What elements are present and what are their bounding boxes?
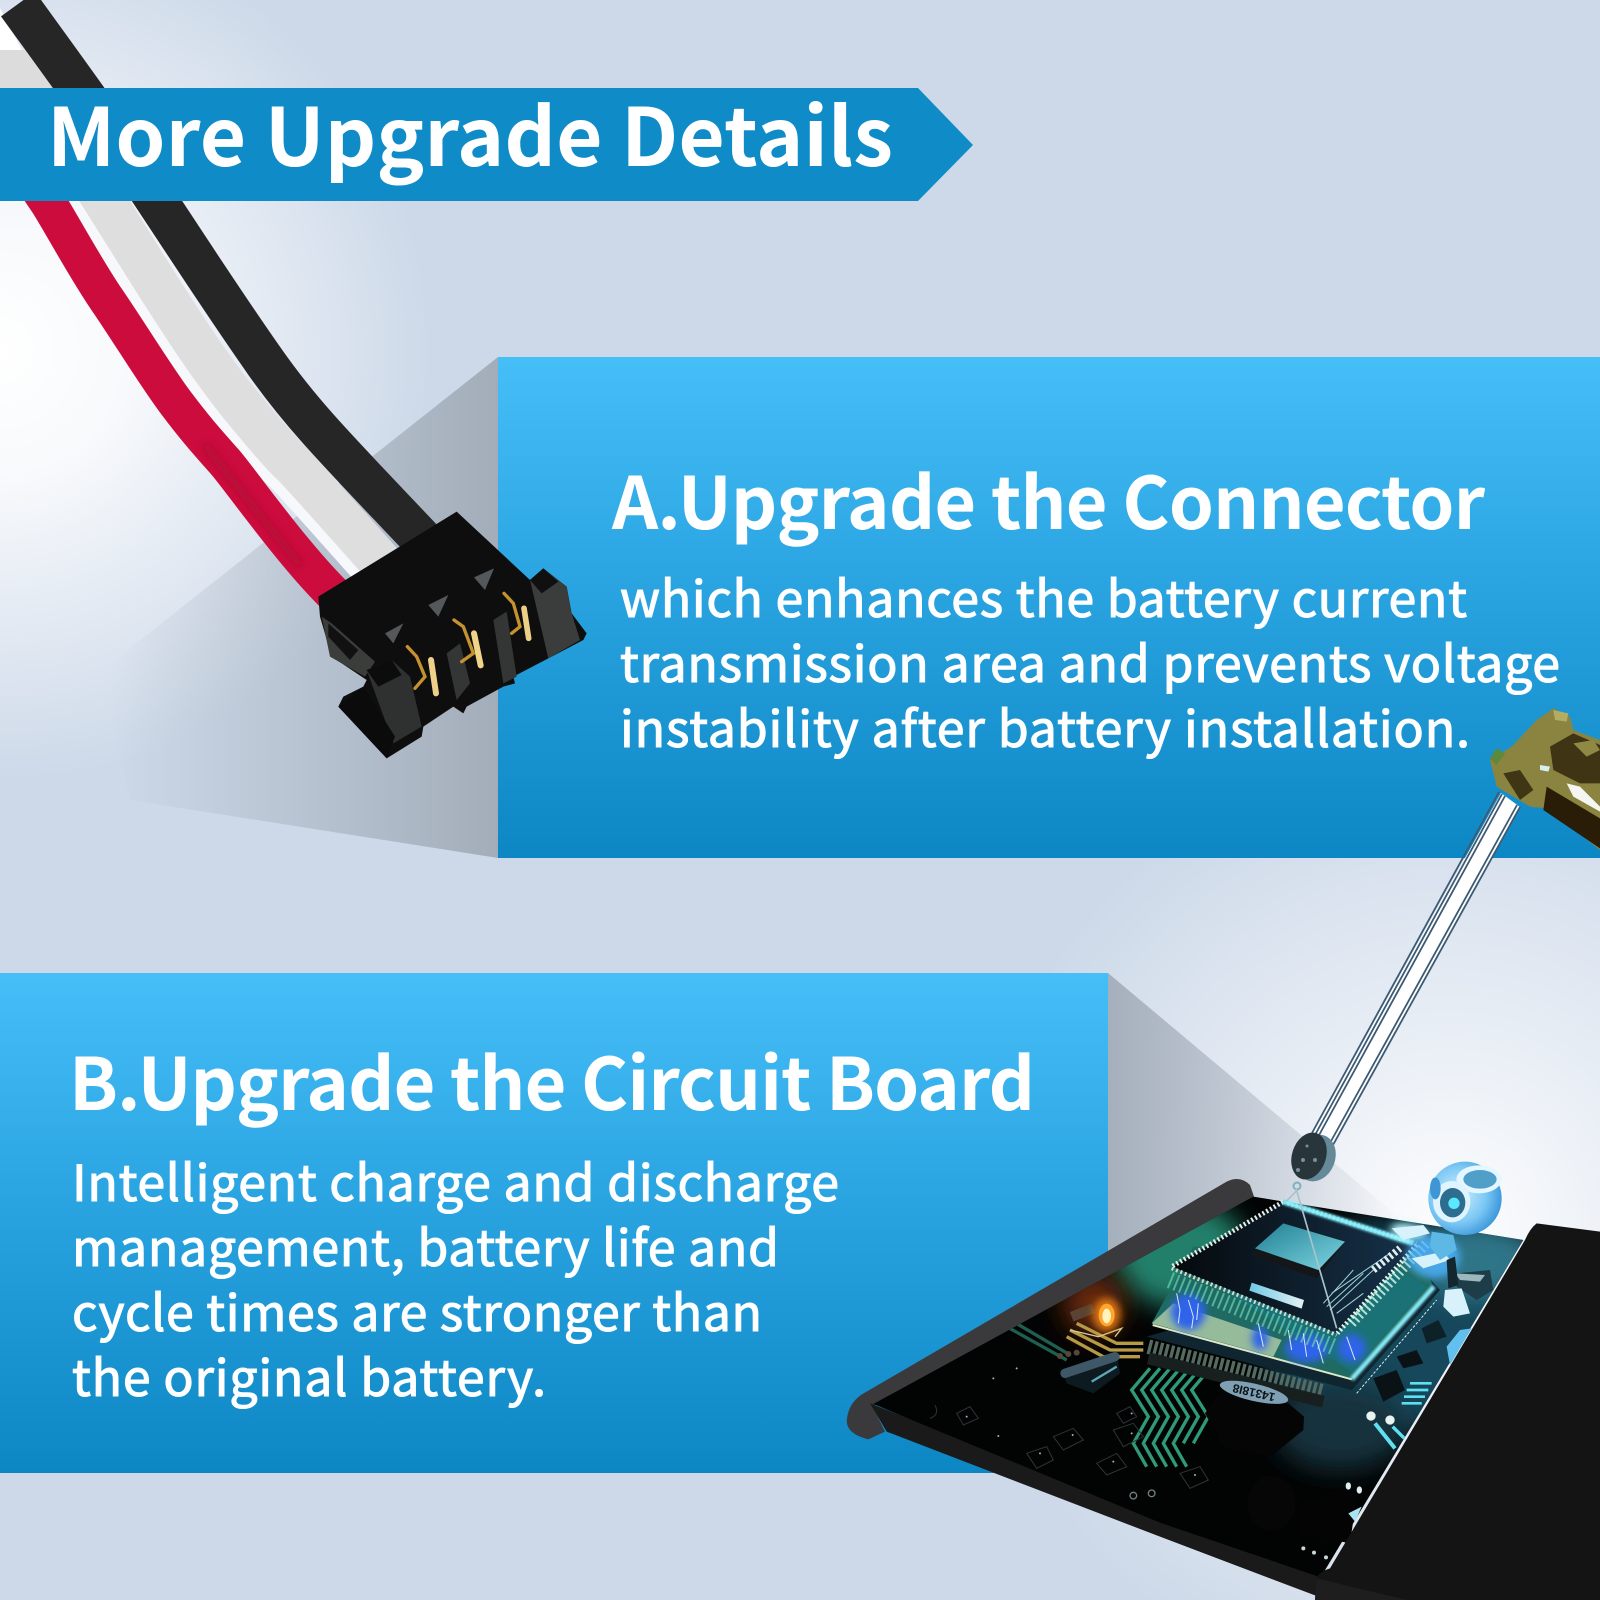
illustration: hook disc: [1285, 1128, 1343, 1190]
dark capacitor: [1248, 1476, 1296, 1531]
lightning detail: [1177, 1293, 1355, 1363]
illustration: circuit board: [847, 1162, 1600, 1600]
description B: Intelligent charge and discharge: [72, 1144, 839, 1216]
battery body: [1315, 1223, 1600, 1600]
right side ICs: [1357, 1270, 1493, 1425]
text block: connector upgrade: [611, 445, 1560, 762]
small sockets: [930, 1405, 1208, 1488]
heading A: A.Upgrade the Connector: [611, 445, 1486, 550]
description B: cycle times are stronger than: [72, 1274, 762, 1346]
lower right components: [1300, 1482, 1362, 1559]
processor chip: [1170, 1188, 1427, 1347]
description A: which enhances the battery current: [620, 560, 1467, 632]
text block: circuit board upgrade: [69, 1026, 1035, 1411]
board rim: [847, 1179, 1254, 1439]
panel shadow A: [100, 357, 498, 858]
heading B: B.Upgrade the Circuit Board: [69, 1026, 1035, 1131]
illustration: lifting rod: [1312, 792, 1520, 1145]
description B: management, battery life and: [72, 1209, 779, 1281]
title: More Upgrade Details: [47, 74, 893, 190]
robot: [1392, 1162, 1502, 1365]
board underside: [870, 1403, 1323, 1597]
board surface: [874, 1196, 1524, 1576]
description A: [620, 560, 1560, 762]
light flare: [1389, 1221, 1428, 1243]
panel: upgrade the connector: [498, 357, 1600, 858]
description A: instability after battery installation.: [620, 690, 1470, 762]
description B: [72, 1144, 839, 1411]
illustration: three-colour wires: [0, 4, 430, 605]
description A: transmission area and prevents voltage: [620, 625, 1560, 697]
panel: upgrade the circuit board: [0, 973, 1108, 1473]
description B: the original battery.: [72, 1339, 546, 1411]
led flame: [1070, 1298, 1122, 1337]
chip stack base: [1147, 1227, 1440, 1402]
chip label: [1249, 1283, 1304, 1309]
illustration: connector plug: [318, 512, 587, 758]
capacitor: 14318I8: [1231, 1381, 1277, 1404]
copper traces: [1007, 1322, 1432, 1467]
illustration: gripper head: [1490, 708, 1600, 850]
electric blue arcs: [1171, 1293, 1366, 1362]
panel shadow B: [1108, 973, 1420, 1473]
crystal component: [1057, 1350, 1120, 1393]
chip die: [1250, 1223, 1345, 1278]
title banner: [0, 74, 973, 201]
capacitor: [1205, 1376, 1304, 1457]
